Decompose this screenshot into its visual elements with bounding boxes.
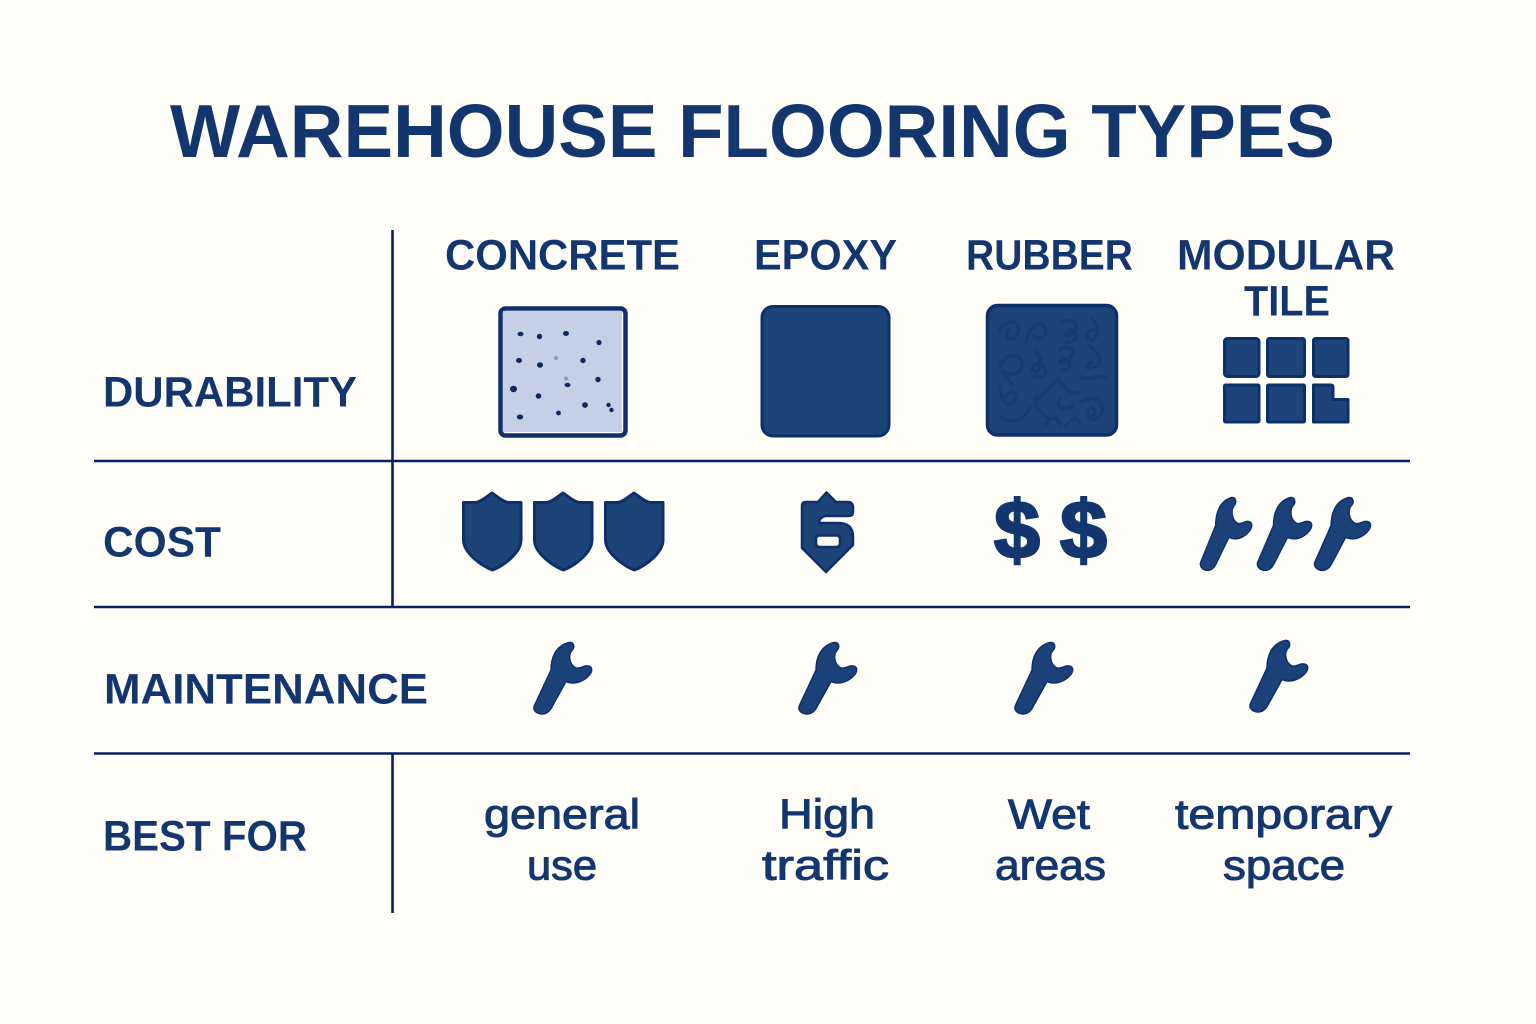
best for: modular tile bbox=[1175, 790, 1392, 888]
row label: durability: DURABILITY bbox=[103, 368, 357, 416]
best for: epoxy: High bbox=[779, 790, 875, 838]
column heading: modular tile bbox=[1177, 232, 1395, 326]
best for: modular tile: temporary bbox=[1175, 790, 1392, 838]
icon: two dollar signs bbox=[994, 485, 1107, 576]
icon: epoxy swatch bbox=[762, 306, 889, 436]
best for: rubber: Wet bbox=[1008, 790, 1090, 838]
best for: epoxy bbox=[762, 790, 889, 888]
best for: rubber: areas bbox=[995, 842, 1106, 888]
column heading: concrete: CONCRETE bbox=[445, 232, 680, 280]
column heading: epoxy: EPOXY bbox=[754, 232, 897, 280]
row label: best for: BEST FOR bbox=[103, 812, 307, 860]
icon: wrench, modular tile maintenance bbox=[1250, 640, 1308, 712]
best for: concrete: use bbox=[527, 842, 597, 888]
best for: rubber bbox=[995, 790, 1106, 888]
icon: two dollar signs: $ bbox=[1060, 485, 1107, 576]
icon: three shields bbox=[464, 493, 663, 570]
icon: cost glyph six on shield bbox=[802, 492, 853, 572]
best for: modular tile: space bbox=[1223, 842, 1345, 888]
column heading: modular tile: TILE bbox=[1244, 278, 1330, 326]
column heading: rubber: RUBBER bbox=[966, 232, 1133, 280]
icon: modular tile grid bbox=[1224, 338, 1348, 422]
title: WAREHOUSE FLOORING TYPES bbox=[170, 89, 1335, 173]
icon: wrench, rubber maintenance bbox=[1015, 642, 1073, 714]
icon: three wrenches bbox=[1200, 498, 1371, 570]
best for: concrete bbox=[484, 790, 640, 888]
row label: cost: COST bbox=[103, 518, 221, 566]
column heading: modular tile: MODULAR bbox=[1177, 232, 1395, 280]
icon: rubber swatch bbox=[988, 306, 1116, 435]
row label: maintenance: MAINTENANCE bbox=[104, 666, 428, 714]
icon: wrench, concrete maintenance bbox=[534, 642, 592, 714]
best for: concrete: general bbox=[484, 790, 640, 838]
icon: wrench, epoxy maintenance bbox=[799, 642, 857, 714]
icon: concrete swatch bbox=[500, 308, 626, 436]
icon: two dollar signs: $ bbox=[994, 485, 1040, 576]
best for: epoxy: traffic bbox=[762, 842, 889, 888]
